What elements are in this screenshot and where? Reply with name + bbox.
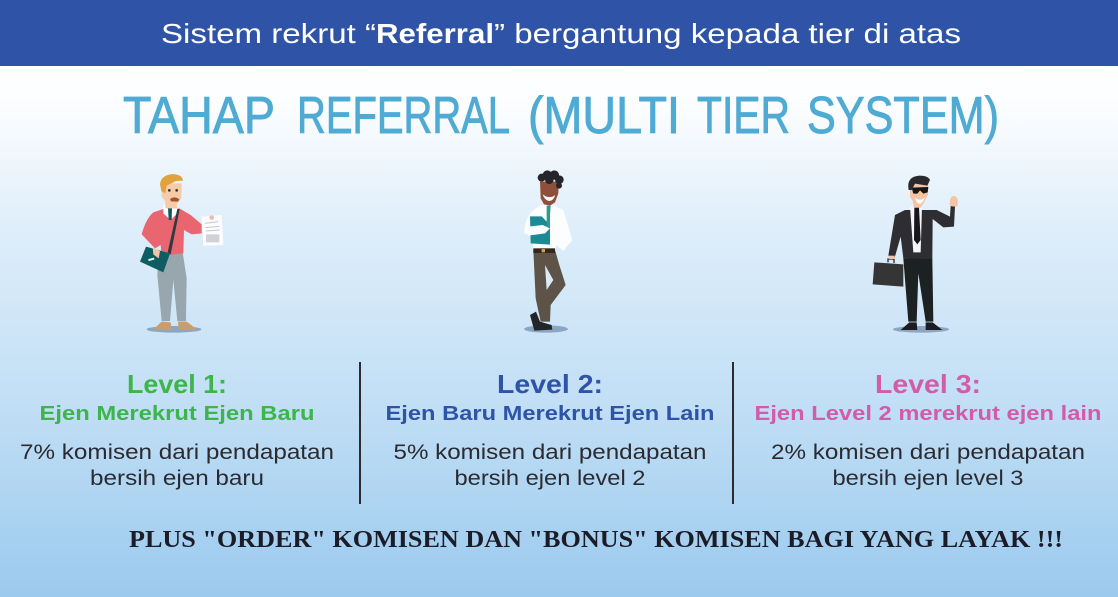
- divider line: [359, 362, 361, 504]
- level 2 heading: Level 2:: [497, 369, 603, 399]
- level 1 description: bersih ejen baru: [90, 467, 264, 490]
- level 3 description: 2% komisen dari pendapatan: [771, 441, 1085, 464]
- level 1 description: 7% komisen dari pendapatan: [20, 441, 334, 464]
- level 2 subheading: Ejen Baru Merekrut Ejen Lain: [386, 403, 714, 425]
- level 3 description: [771, 441, 1085, 490]
- icon: level 2 agent with folder: [524, 170, 572, 333]
- panel: level 1: [20, 369, 334, 490]
- level 2 description: 5% komisen dari pendapatan: [394, 441, 706, 464]
- level 3 heading: Level 3:: [875, 369, 981, 399]
- title: REFERRAL: [297, 87, 510, 145]
- title: TIER: [697, 87, 790, 145]
- header banner: ” bergantung kepada tier di atas: [494, 18, 961, 49]
- title: SYSTEM): [807, 87, 999, 145]
- title: (MULTI: [528, 87, 680, 145]
- title: TAHAP: [123, 87, 275, 145]
- icon: level 3 agent in suit with briefcase: [873, 176, 958, 333]
- header banner: Referral: [376, 18, 494, 49]
- panel: level 2: [386, 369, 714, 490]
- panel: level 3: [754, 369, 1102, 490]
- level 3 description: bersih ejen level 3: [832, 467, 1024, 490]
- level 1 heading: Level 1:: [127, 369, 227, 399]
- header banner: Sistem rekrut “: [161, 18, 376, 49]
- level 1 description: [20, 441, 334, 490]
- level 2 description: bersih ejen level 2: [454, 467, 646, 490]
- icon: level 1 agent with bag and document: [140, 174, 223, 333]
- level 1 subheading: Ejen Merekrut Ejen Baru: [40, 403, 314, 425]
- level 2 description: [394, 441, 706, 490]
- footer note: PLUS "ORDER" KOMISEN DAN "BONUS" KOMISEN BAGI YANG LAYAK !!!: [129, 527, 1063, 553]
- title: [123, 87, 999, 145]
- header banner: [0, 0, 1118, 66]
- divider line: [732, 362, 734, 504]
- level 3 subheading: Ejen Level 2 merekrut ejen lain: [754, 403, 1102, 425]
